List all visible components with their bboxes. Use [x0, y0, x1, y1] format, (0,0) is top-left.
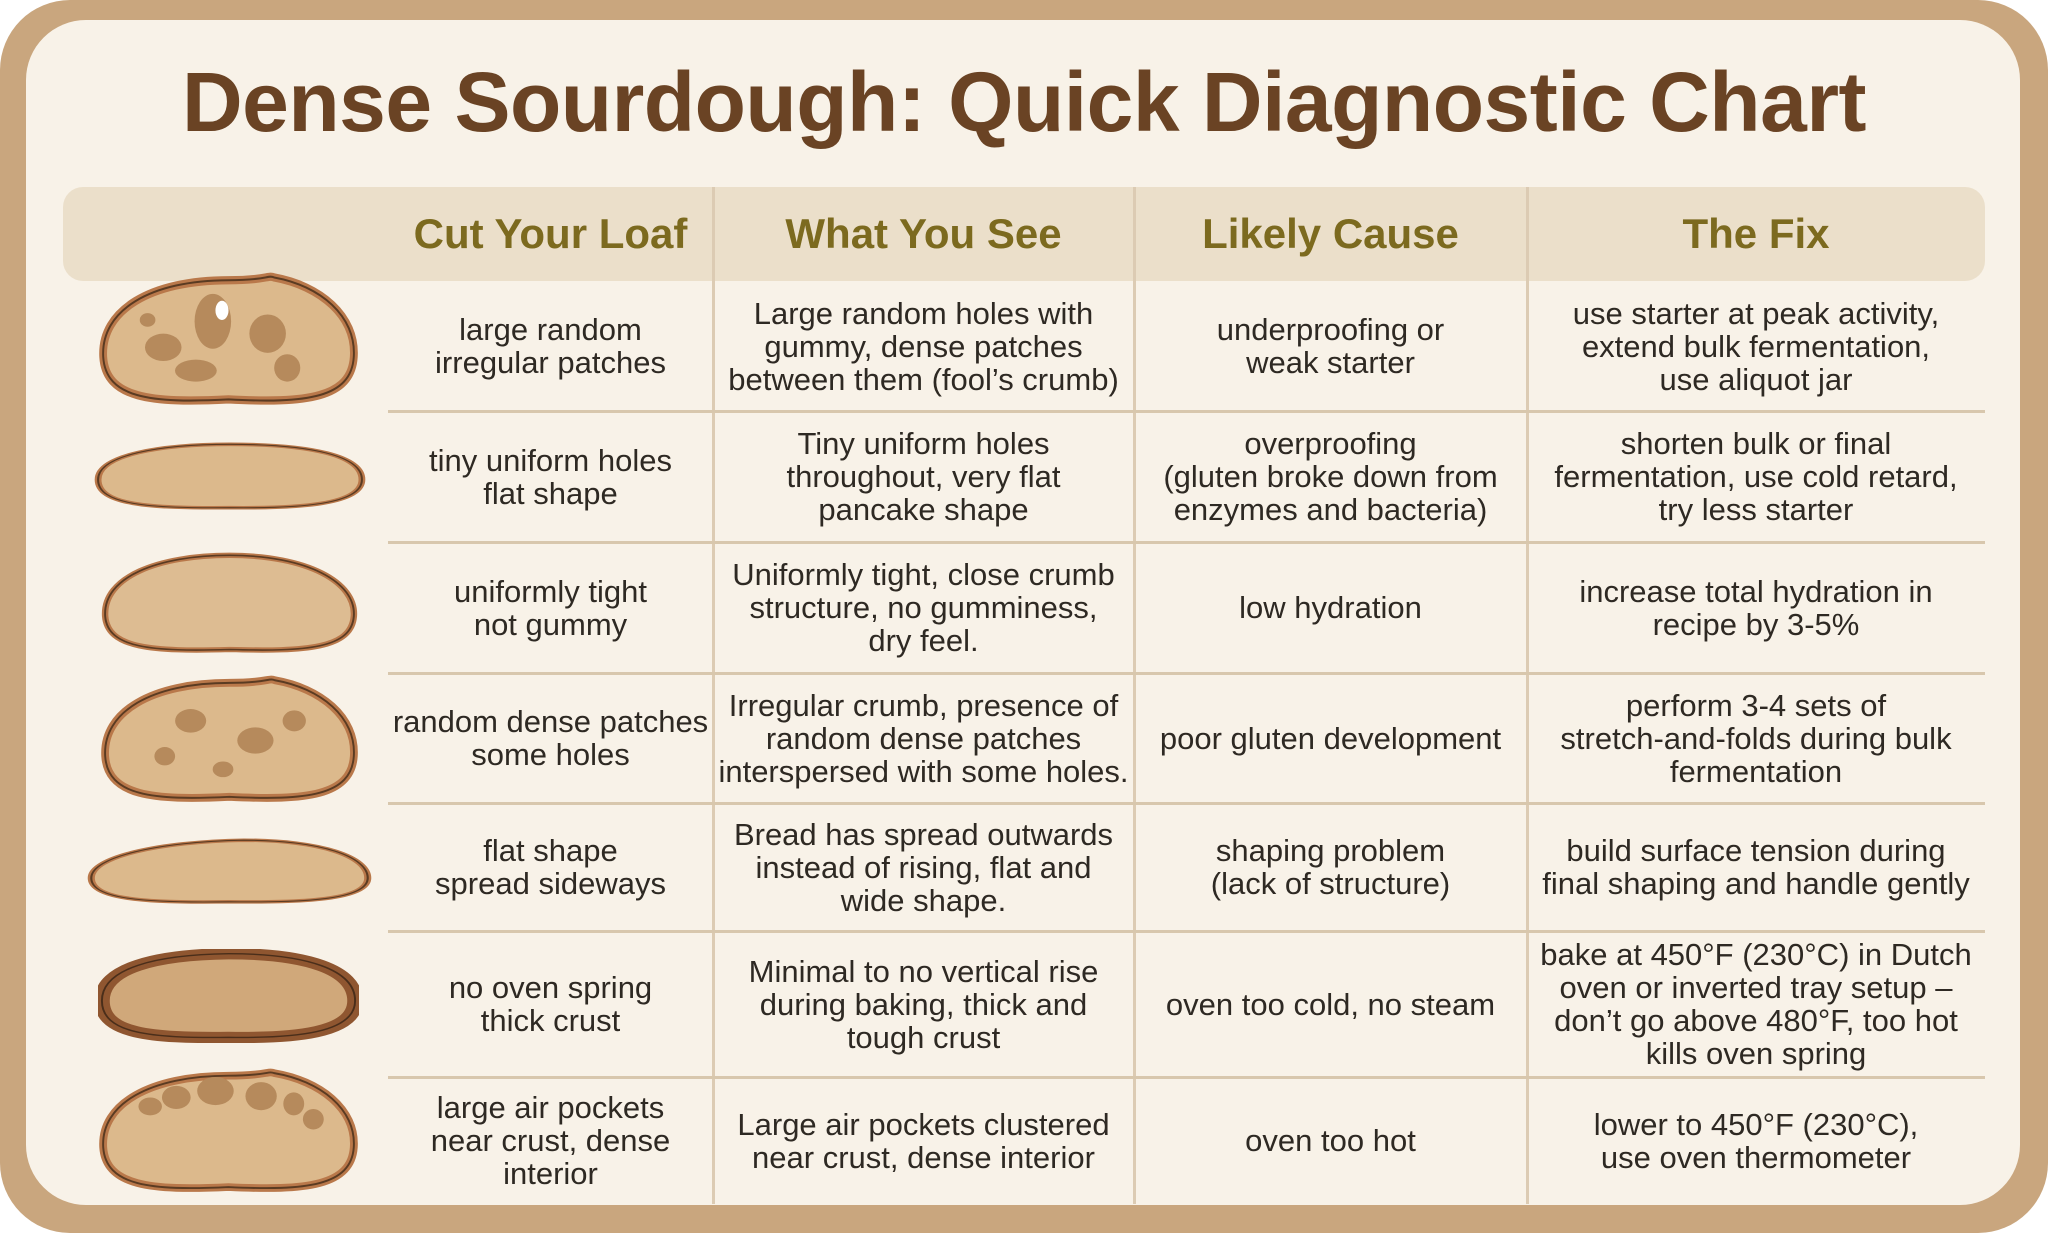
icon: loaf 4 dense patches — [101, 676, 358, 802]
text: throughout, very flat — [786, 459, 1060, 494]
text: shorten bulk or final — [1621, 426, 1891, 461]
icon: loaf 5 spread — [88, 838, 372, 904]
text: pancake shape — [818, 492, 1029, 527]
text: random dense patches — [393, 704, 708, 739]
text: use starter at peak activity, — [1573, 296, 1939, 330]
text: interspersed with some holes. — [718, 754, 1129, 788]
text: use oven thermometer — [1601, 1140, 1911, 1174]
text: spread sideways — [435, 866, 666, 901]
text: Uniformly tight, close crumb — [732, 557, 1115, 592]
row 4 texts — [393, 688, 1952, 788]
text: shaping problem — [1216, 833, 1445, 868]
text: wide shape. — [841, 882, 1006, 918]
text: thick crust — [481, 1003, 620, 1038]
text: Irregular crumb, presence of — [729, 688, 1118, 722]
text: instead of rising, flat and — [755, 850, 1092, 884]
text: no oven spring — [449, 970, 652, 1005]
header: likely cause: Likely Cause — [1202, 210, 1459, 257]
text: build surface tension during — [1566, 833, 1946, 868]
title: Dense Sourdough: Quick Diagnostic Chart — [182, 55, 1866, 149]
text: recipe by 3-5% — [1653, 606, 1859, 642]
text: oven or inverted tray setup – — [1560, 970, 1952, 1005]
text: Large random holes with — [754, 296, 1093, 330]
text: use aliquot jar — [1659, 362, 1852, 396]
text: poor gluten development — [1160, 720, 1501, 756]
text: between them (fool’s crumb) — [728, 362, 1119, 396]
icon: loaf 2 flat — [94, 442, 366, 510]
text: bake at 450°F (230°C) in Dutch — [1540, 937, 1972, 972]
row 1 texts — [435, 296, 1939, 396]
text: Tiny uniform holes — [797, 426, 1050, 461]
row 5 texts — [435, 816, 1970, 918]
text: during baking, thick and — [760, 986, 1087, 1022]
text: stretch-and-folds during bulk — [1560, 720, 1952, 756]
text: flat shape — [483, 833, 618, 868]
icon: loaf 3 tight — [102, 552, 358, 653]
text: near crust, dense — [431, 1123, 670, 1158]
text: kills oven spring — [1646, 1036, 1866, 1071]
icon: loaf 1 fool's crumb — [99, 272, 358, 405]
text: increase total hydration in — [1579, 574, 1933, 608]
text: large random — [459, 312, 642, 347]
text: Minimal to no vertical rise — [749, 954, 1098, 988]
icon: loaf 7 air pockets — [99, 1068, 358, 1192]
text: weak starter — [1246, 345, 1415, 380]
text: final shaping and handle gently — [1542, 866, 1970, 901]
text: fermentation — [1670, 754, 1842, 788]
text: Bread has spread outwards — [734, 816, 1113, 852]
text: fermentation, use cold retard, — [1554, 459, 1958, 494]
text: interior — [503, 1156, 598, 1191]
text: perform 3-4 sets of — [1626, 688, 1886, 722]
text: extend bulk fermentation, — [1582, 328, 1930, 364]
text: not gummy — [474, 606, 627, 642]
row 2 texts — [429, 426, 1958, 527]
text: structure, no gumminess, — [749, 590, 1098, 625]
text: (lack of structure) — [1211, 866, 1450, 901]
text: Large air pockets clustered — [737, 1106, 1110, 1142]
text: oven too cold, no steam — [1166, 986, 1495, 1022]
text: gummy, dense patches — [764, 328, 1083, 364]
header: the fix: The Fix — [1682, 210, 1830, 257]
text: some holes — [471, 737, 630, 772]
header: cut your loaf: Cut Your Loaf — [414, 210, 687, 257]
text: random dense patches — [766, 720, 1081, 756]
text: tiny uniform holes — [429, 442, 672, 478]
text: irregular patches — [435, 345, 666, 380]
text: near crust, dense interior — [752, 1140, 1095, 1174]
text: low hydration — [1239, 590, 1422, 625]
text: uniformly tight — [454, 574, 647, 608]
text: overproofing — [1244, 426, 1417, 461]
text: underproofing or — [1217, 312, 1444, 347]
icon: loaf 6 thick crust — [98, 949, 359, 1043]
text: tough crust — [847, 1020, 1000, 1054]
header: what you see: What You See — [785, 210, 1062, 257]
text: lower to 450°F (230°C), — [1594, 1106, 1918, 1142]
text: large air pockets — [437, 1090, 664, 1125]
text: don’t go above 480°F, too hot — [1554, 1003, 1958, 1038]
header bar — [63, 187, 1985, 281]
text: (gluten broke down from — [1163, 459, 1498, 494]
text: enzymes and bacteria) — [1174, 492, 1487, 527]
text: try less starter — [1659, 492, 1853, 527]
text: oven too hot — [1245, 1123, 1416, 1158]
text: flat shape — [483, 476, 618, 510]
row 6 texts — [449, 937, 1972, 1071]
row 7 texts — [431, 1090, 1918, 1191]
row 3 texts — [454, 557, 1933, 658]
text: dry feel. — [868, 623, 979, 658]
